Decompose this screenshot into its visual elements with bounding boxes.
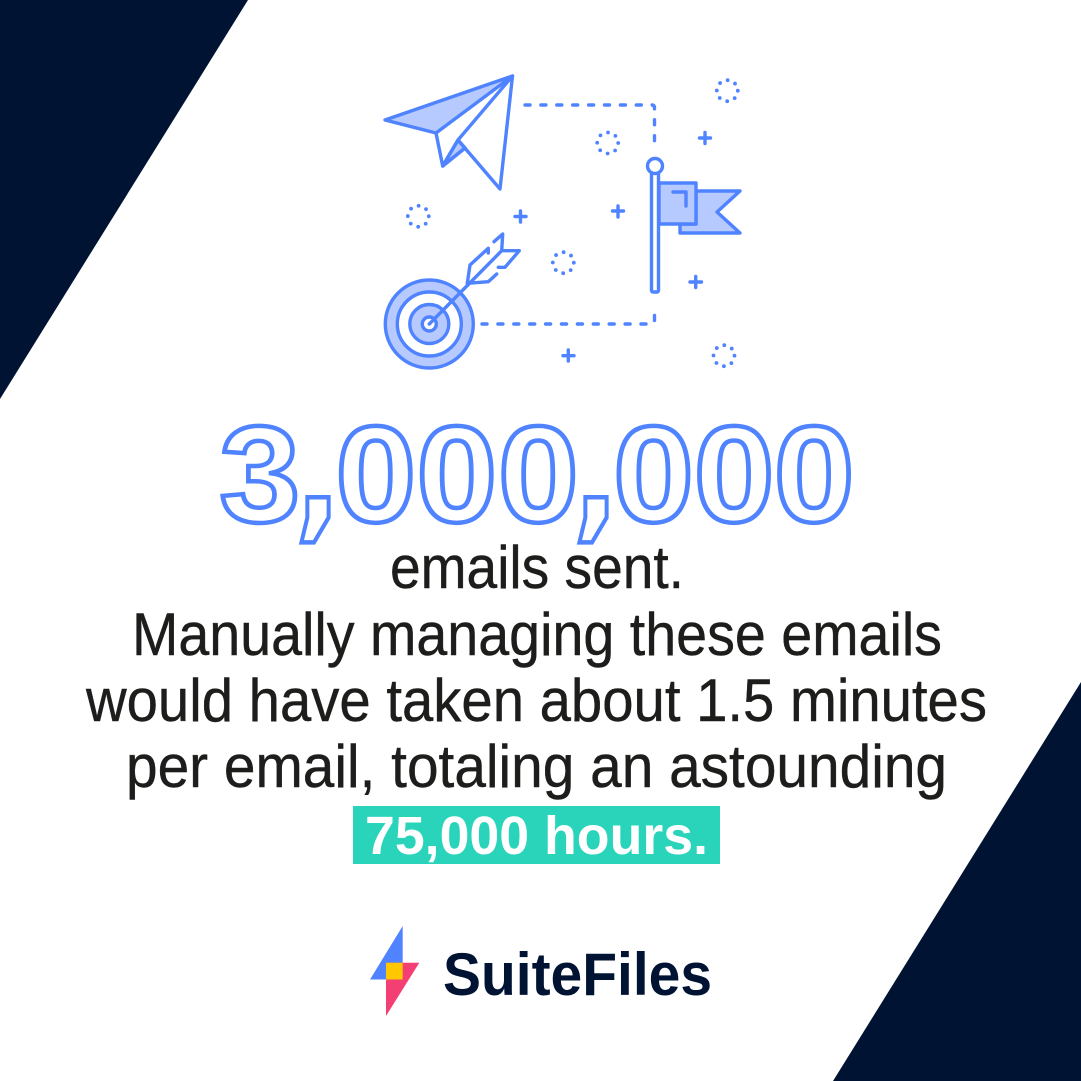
illustration: goal journey xyxy=(385,76,740,368)
body text xyxy=(85,534,987,800)
dashed path: flag to target xyxy=(482,307,654,324)
decorative sparkles: plus signs xyxy=(515,132,710,361)
body text: emails sent. xyxy=(390,534,684,601)
decorative sparkles: dotted circles xyxy=(408,80,738,366)
big number: 000 xyxy=(335,397,579,551)
body text: Manually managing these emails xyxy=(132,601,942,668)
logo mark: lightning bolt xyxy=(370,926,419,1016)
icon: flag xyxy=(648,158,740,292)
dashed path: plane to flag xyxy=(525,105,654,141)
icon: target with arrow xyxy=(385,234,519,368)
big number xyxy=(219,397,855,556)
highlight: 75,000 hours: 75,000 hours. xyxy=(365,806,708,866)
big number: , xyxy=(573,398,619,556)
body text: per email, totaling an astounding xyxy=(126,733,947,800)
icon: paper plane xyxy=(385,76,512,189)
logo wordmark: SuiteFiles xyxy=(443,941,712,1008)
corner triangle: top left xyxy=(0,0,248,399)
body text: would have taken about 1.5 minutes xyxy=(85,667,987,734)
big number: 3 xyxy=(219,397,300,551)
big number: , xyxy=(295,398,341,556)
big number: 000 xyxy=(613,397,855,551)
corner triangle: bottom right xyxy=(833,682,1081,1081)
logo: SuiteFiles xyxy=(370,926,712,1016)
